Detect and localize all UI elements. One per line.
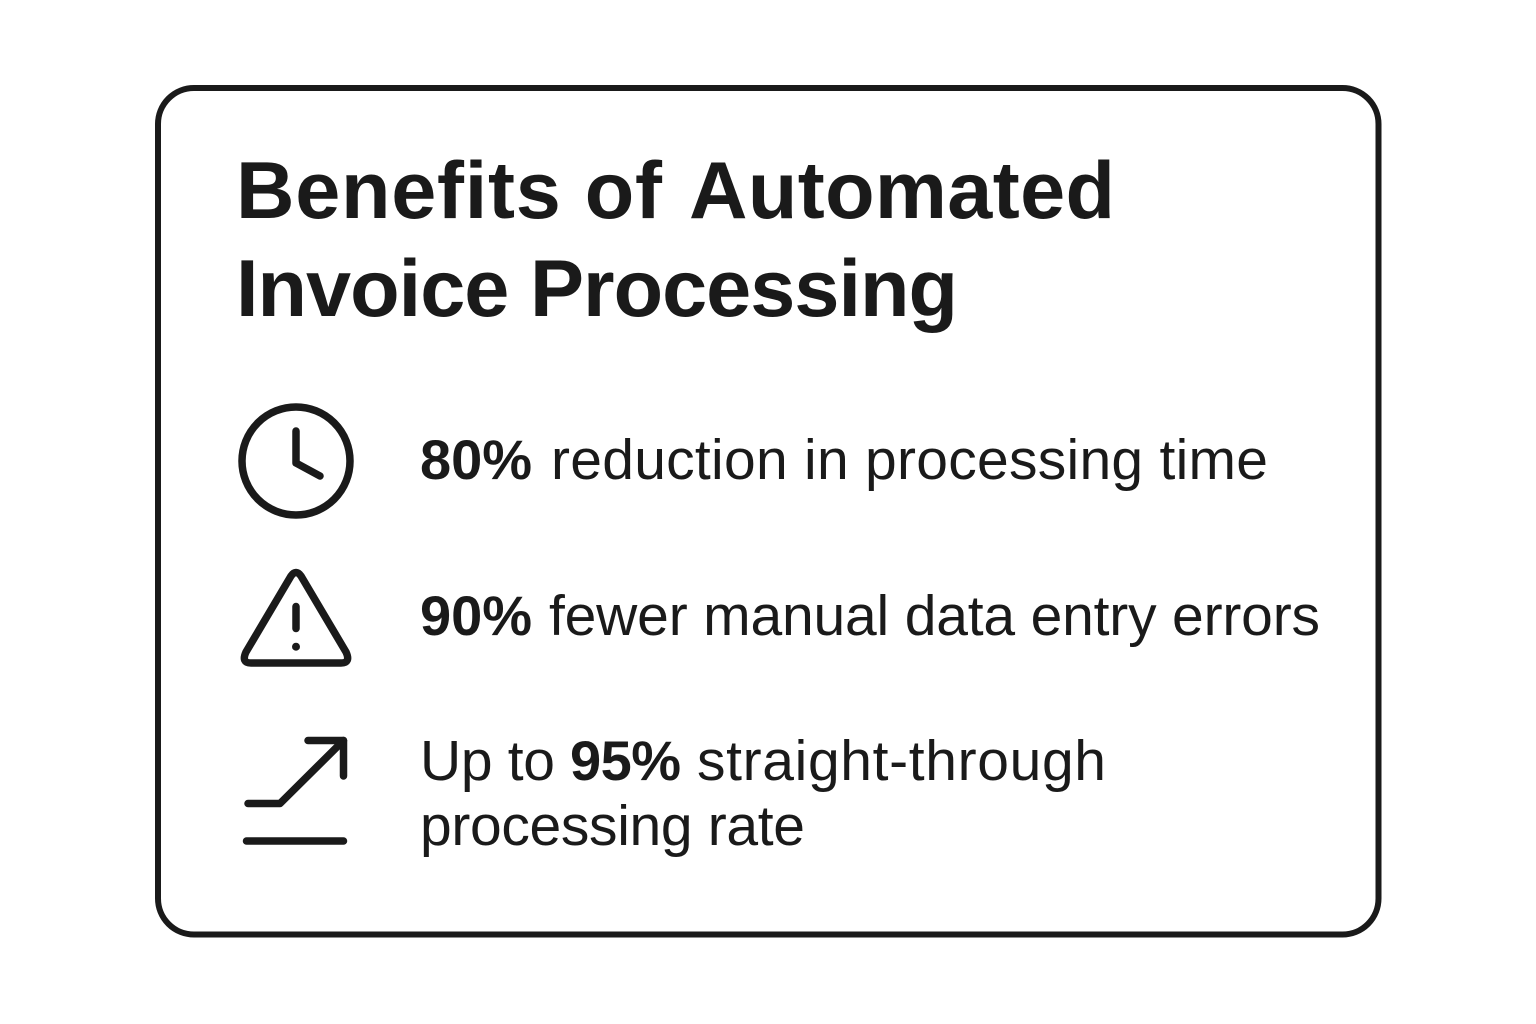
icon: clock	[242, 407, 350, 515]
benefit text: 95% straight-through: processing rate	[420, 794, 805, 858]
benefit text: 95% straight-through: 95%	[570, 729, 681, 792]
panel: benefits card	[158, 88, 1378, 934]
benefit text: 95% straight-through: straight-through	[697, 729, 1106, 793]
icon: warning triangle	[244, 572, 348, 663]
benefit text: 80% reduction: 80%	[420, 428, 532, 491]
title: Automated	[689, 146, 1115, 236]
title: Invoice Processing	[236, 244, 958, 334]
title: Benefits of	[236, 146, 663, 236]
benefit text: 90% fewer errors: 90%	[420, 584, 532, 647]
benefit text: 90% fewer errors: fewer manual data entry errors	[549, 584, 1320, 648]
benefit text: 95% straight-through	[420, 729, 1106, 858]
icon: rising arrow	[246, 740, 344, 841]
benefit text: 80% reduction: reduction in processing time	[551, 428, 1268, 492]
benefit text: 95% straight-through: Up to	[420, 729, 555, 793]
title	[236, 146, 1115, 334]
